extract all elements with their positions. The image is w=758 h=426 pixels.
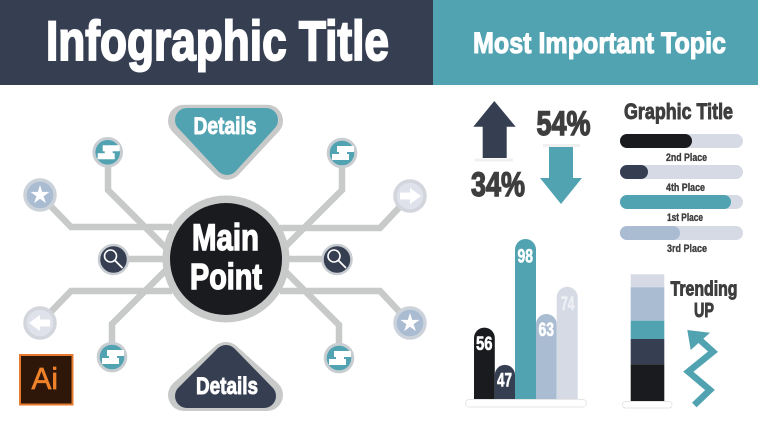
trending up heading: UP: [694, 300, 714, 322]
chart: rounded column chart: [466, 239, 586, 407]
arrow: down 54 percent: 54%: [536, 105, 590, 143]
icon: search node left: [99, 245, 128, 274]
column 98: [515, 239, 536, 399]
callout: top details: [184, 113, 267, 164]
title: Infographic Title: [46, 9, 389, 72]
callout: top details: Details: [194, 113, 256, 140]
icon: star node right: [395, 308, 425, 338]
trending up heading: [670, 279, 738, 322]
column 56: 56: [476, 334, 492, 355]
callout: bottom details: [184, 357, 267, 400]
icon: left arrow node: [25, 308, 55, 338]
column 63: [536, 314, 557, 399]
column 74: [557, 287, 578, 399]
bar: 4th place: [620, 165, 743, 194]
icon: teal node bottom right: [325, 344, 353, 372]
header: topic band: [433, 0, 758, 85]
connector lines: [40, 153, 410, 358]
arrow: up 34 percent: [471, 101, 525, 204]
chart heading: Graphic Title: [624, 99, 733, 124]
main point text: Point: [190, 256, 262, 297]
icon: teal node top right: [328, 139, 356, 167]
header: main title band: [0, 0, 433, 85]
chart: stacked column: [622, 274, 672, 408]
icon: teal node top left: [94, 138, 122, 166]
column 98: 98: [518, 246, 533, 267]
icon: right arrow node: [395, 181, 425, 211]
column 74: 74: [561, 294, 575, 315]
icon: Adobe Illustrator logo: Ai: [32, 361, 58, 396]
bar: 3rd place: 3rd Place: [667, 243, 707, 255]
icon: teal node bottom left: [98, 343, 126, 371]
icon: search node right: [322, 245, 352, 274]
arrow: up 34 percent: 34%: [471, 166, 525, 204]
bar: 4th place: 4th Place: [666, 182, 705, 194]
chart: horizontal place bars: [620, 99, 743, 255]
bar: 2nd place: [620, 134, 743, 164]
main point text: [190, 217, 262, 297]
central circle: main point: [162, 196, 290, 322]
callout: bottom details: Details: [196, 373, 258, 400]
bar: 1st place: 1st Place: [667, 212, 703, 224]
main point text: Main: [192, 217, 259, 258]
column 63: 63: [538, 320, 554, 341]
arrow: down 54 percent: [536, 105, 590, 204]
arrow: zigzag trending up: [687, 330, 713, 405]
bar: 3rd place: [620, 226, 743, 255]
column 47: 47: [497, 371, 512, 392]
trending up heading: Trending: [670, 279, 738, 301]
column 56: [474, 328, 495, 399]
bar: 2nd place: 2nd Place: [666, 152, 707, 164]
column 47: [495, 365, 515, 399]
bar: 1st place: [620, 195, 743, 224]
icon: star node left: [25, 180, 55, 210]
icon: Adobe Illustrator logo: [20, 355, 72, 404]
